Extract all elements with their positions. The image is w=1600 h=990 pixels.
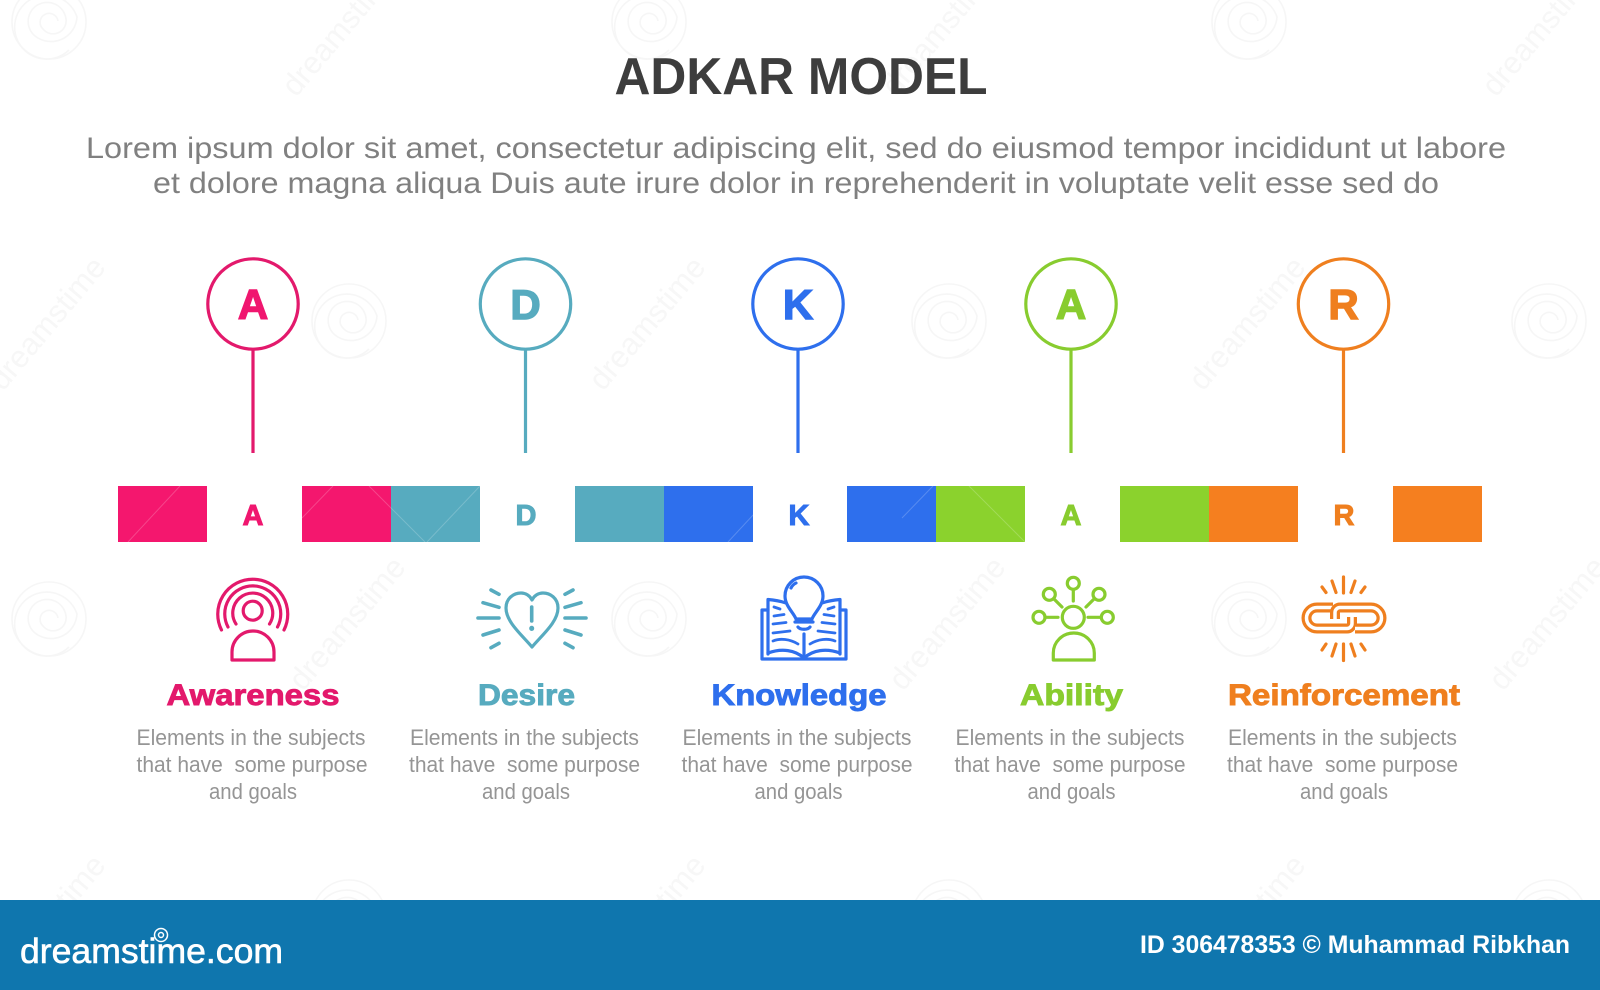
watermark pattern: dreamstime bbox=[1182, 250, 1312, 397]
panel: desire bbox=[409, 259, 640, 804]
label: Reinforcement: Reinforcement bbox=[1228, 679, 1460, 712]
description bbox=[682, 725, 912, 804]
description: Elements in the subjects bbox=[1228, 725, 1457, 750]
pin: R circle and stem bbox=[1298, 259, 1389, 453]
description: and goals bbox=[209, 779, 297, 804]
pin: R circle and stem: R bbox=[1328, 281, 1359, 328]
description: and goals bbox=[482, 779, 570, 804]
description: Elements in the subjects bbox=[682, 725, 912, 750]
bar letter K: K bbox=[789, 500, 810, 532]
panel: knowledge bbox=[682, 259, 912, 804]
description: Elements in the subjects bbox=[410, 725, 639, 750]
description: Elements in the subjects bbox=[956, 725, 1184, 750]
watermark pattern: dreamstime bbox=[882, 550, 1012, 697]
pin: A circle and stem: A bbox=[1056, 281, 1086, 328]
label: Desire: Desire bbox=[478, 679, 575, 712]
subtitle text block bbox=[86, 132, 1506, 200]
description: and goals bbox=[754, 779, 842, 804]
description bbox=[136, 725, 368, 804]
title: ADKAR MODEL bbox=[614, 48, 988, 106]
pin: A circle and stem bbox=[208, 259, 298, 453]
icon: chain link with rays bbox=[1306, 577, 1382, 660]
subtitle text block: Lorem ipsum dolor sit amet, consectetur adipiscing elit, sed do eiusmod tempor incididunt ut labore bbox=[86, 132, 1506, 165]
description: that have some purpose bbox=[682, 752, 912, 777]
icon: person with signal waves bbox=[218, 579, 288, 660]
footer credit: ID 306478353 © Muhammad Ribkhan bbox=[1140, 931, 1570, 959]
watermark pattern: dreamstime bbox=[282, 550, 412, 697]
subtitle text block: et dolore magna aliqua Duis aute irure dolor in reprehenderit in voluptate velit esse sed do bbox=[153, 167, 1439, 200]
pin: D circle and stem bbox=[480, 259, 571, 453]
description: that have some purpose bbox=[409, 752, 640, 777]
description: Elements in the subjects bbox=[136, 725, 366, 750]
label: Knowledge: Knowledge bbox=[712, 679, 886, 712]
pin: A circle and stem: A bbox=[238, 281, 268, 328]
segmented timeline bar bbox=[118, 486, 1482, 542]
pin: A circle and stem bbox=[1026, 259, 1116, 453]
bar letter A: A bbox=[1061, 500, 1082, 532]
description bbox=[1227, 725, 1458, 804]
description: that have some purpose bbox=[1227, 752, 1458, 777]
description bbox=[409, 725, 640, 804]
footer logo: dreamstime.com bbox=[20, 932, 283, 971]
pin: K circle and stem: K bbox=[783, 281, 813, 328]
pin: D circle and stem: D bbox=[510, 281, 541, 328]
description bbox=[954, 725, 1186, 804]
description: that have some purpose bbox=[136, 752, 368, 777]
panel: ability bbox=[954, 259, 1186, 804]
panel: reinforcement bbox=[1227, 259, 1460, 804]
bar letter D: D bbox=[516, 500, 536, 532]
bar letter A: A bbox=[243, 500, 264, 532]
description: and goals bbox=[1028, 779, 1116, 804]
icon: heart with exclamation and rays bbox=[478, 590, 586, 648]
watermark pattern: dreamstime bbox=[582, 250, 712, 397]
icon: person with connected nodes bbox=[1033, 577, 1113, 660]
pin: K circle and stem bbox=[753, 259, 843, 453]
label: Awareness: Awareness bbox=[166, 679, 340, 712]
icon: open book with light bulb bbox=[762, 577, 846, 659]
description: that have some purpose bbox=[954, 752, 1186, 777]
description: and goals bbox=[1300, 779, 1388, 804]
panel: awareness bbox=[136, 259, 368, 804]
bar letter R: R bbox=[1334, 500, 1355, 532]
footer band bbox=[0, 900, 1600, 990]
label: Ability: Ability bbox=[1020, 679, 1123, 712]
